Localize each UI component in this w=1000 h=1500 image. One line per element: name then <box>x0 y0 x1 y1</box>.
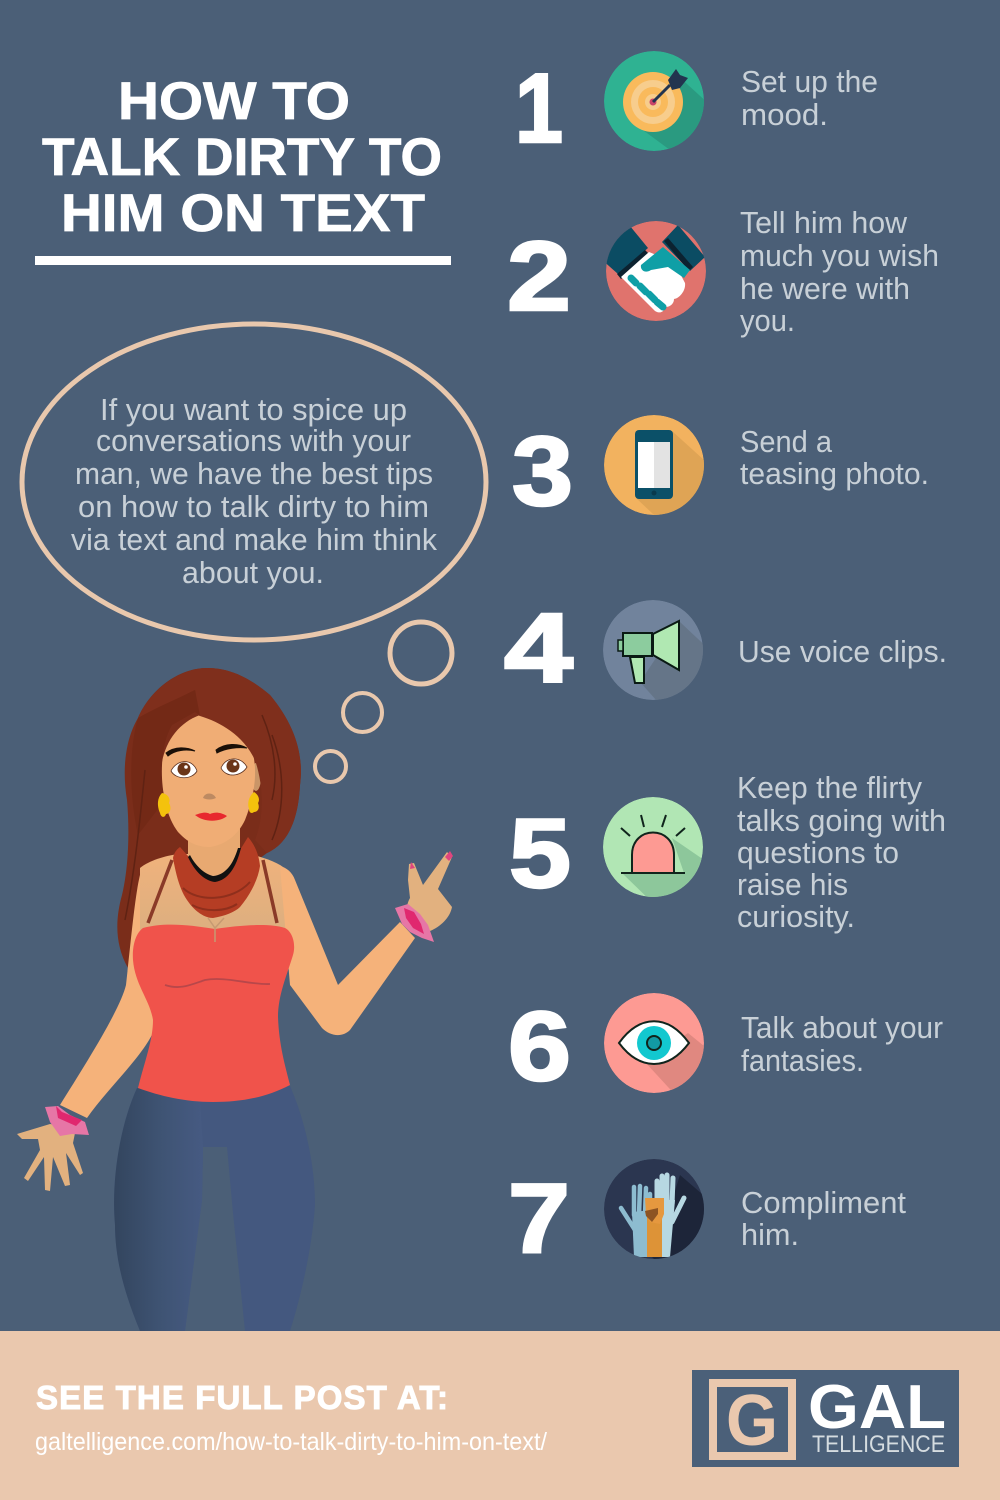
pale hand <box>657 1175 684 1222</box>
thought bubble: If you want to spice up <box>100 392 407 427</box>
neck <box>188 825 240 875</box>
eyes <box>171 762 197 778</box>
orange fist <box>647 1215 662 1257</box>
icon: megaphone <box>603 600 703 700</box>
step 7: Compliment <box>741 1185 906 1220</box>
left scrunchie <box>45 1106 89 1136</box>
step 1: mood. <box>741 97 828 132</box>
title: TALK DIRTY TO <box>42 128 442 187</box>
step 5: curiosity. <box>737 899 855 934</box>
thought bubble: about you. <box>182 555 324 590</box>
step 6: 6 <box>508 991 571 1101</box>
step 5: Keep the flirty <box>737 770 922 805</box>
icon: raised hands <box>604 1159 704 1259</box>
thought circles <box>315 622 452 782</box>
straps <box>148 860 277 923</box>
scarf fold <box>183 882 250 910</box>
icon: eye <box>604 993 704 1093</box>
earrings <box>158 793 170 817</box>
title: HIM ON TEXT <box>61 184 425 243</box>
right scrunchie <box>395 904 434 942</box>
step 7: him. <box>741 1217 799 1252</box>
footer url: galtelligence.com/how-to-talk-dirty-to-him-on-text/ <box>35 1428 547 1456</box>
scarf <box>173 837 260 918</box>
trousers <box>114 1086 315 1331</box>
left hand <box>17 1124 83 1191</box>
step 7: 7 <box>508 1163 570 1273</box>
step 5: raise his <box>737 867 848 902</box>
step 4: Use voice clips. <box>738 634 947 669</box>
right arm <box>280 866 415 1035</box>
hair strands <box>125 715 282 920</box>
logo: G <box>726 1381 778 1461</box>
logo wordmark: GAL <box>808 1373 946 1442</box>
right nails <box>410 851 453 869</box>
top fold <box>165 979 270 987</box>
step 2 <box>507 205 939 338</box>
step 6: fantasies. <box>741 1043 864 1078</box>
necklace <box>208 918 224 942</box>
step 7 <box>511 1159 906 1259</box>
logo <box>692 1370 959 1467</box>
logo G box <box>713 1383 792 1456</box>
woman illustration <box>17 668 453 1331</box>
face <box>162 715 255 847</box>
thought bubble <box>22 324 486 640</box>
logo: TELLIGENCE <box>812 1431 945 1458</box>
nose <box>203 794 216 800</box>
thought bubble: conversations with your <box>96 423 411 458</box>
scarf collar shadow <box>188 848 241 882</box>
step 1: Set up the <box>741 64 878 99</box>
step 2: Tell him how <box>740 205 908 240</box>
step 1: 1 <box>515 53 563 163</box>
hair front <box>138 668 301 853</box>
step 3: Send a <box>740 424 833 459</box>
red top <box>133 925 294 1102</box>
right hand <box>407 852 452 931</box>
footer band <box>0 1331 1000 1500</box>
step 2: much you wish <box>740 238 939 273</box>
title: HOW TO <box>118 72 350 131</box>
icon: target <box>604 51 710 151</box>
step 6: Talk about your <box>741 1010 943 1045</box>
step 3 <box>513 415 926 515</box>
step 1 <box>519 51 877 151</box>
icon: handshake <box>600 221 706 321</box>
thought bubble: man, we have the best tips <box>75 456 433 491</box>
lips <box>195 813 227 821</box>
step 3: teasing photo. <box>740 456 929 491</box>
left leg shading <box>114 1088 203 1331</box>
title <box>35 72 451 265</box>
brows <box>166 744 247 756</box>
left arm <box>60 868 170 1118</box>
step 2: he were with <box>740 271 910 306</box>
step 2: 2 <box>507 221 571 331</box>
hair back <box>117 668 301 968</box>
step 4 <box>504 600 944 700</box>
shoulders and chest <box>140 854 297 945</box>
step 5: questions to <box>737 835 899 870</box>
step 4: 4 <box>504 593 573 703</box>
icon: alarm light <box>603 797 703 897</box>
step 2: you. <box>740 303 795 338</box>
step 6 <box>510 993 943 1093</box>
step 3: 3 <box>512 416 573 526</box>
step 5: talks going with <box>737 803 946 838</box>
thought bubble: via text and make him think <box>71 522 437 557</box>
ears <box>154 766 166 794</box>
footer heading: SEE THE FULL POST AT: <box>36 1379 448 1416</box>
icon: phone <box>604 415 704 515</box>
step 5: 5 <box>509 798 571 908</box>
hair left lock <box>131 690 200 835</box>
blue hand <box>621 1186 650 1230</box>
step 5 <box>509 770 946 934</box>
thought bubble: on how to talk dirty to him <box>78 489 429 524</box>
